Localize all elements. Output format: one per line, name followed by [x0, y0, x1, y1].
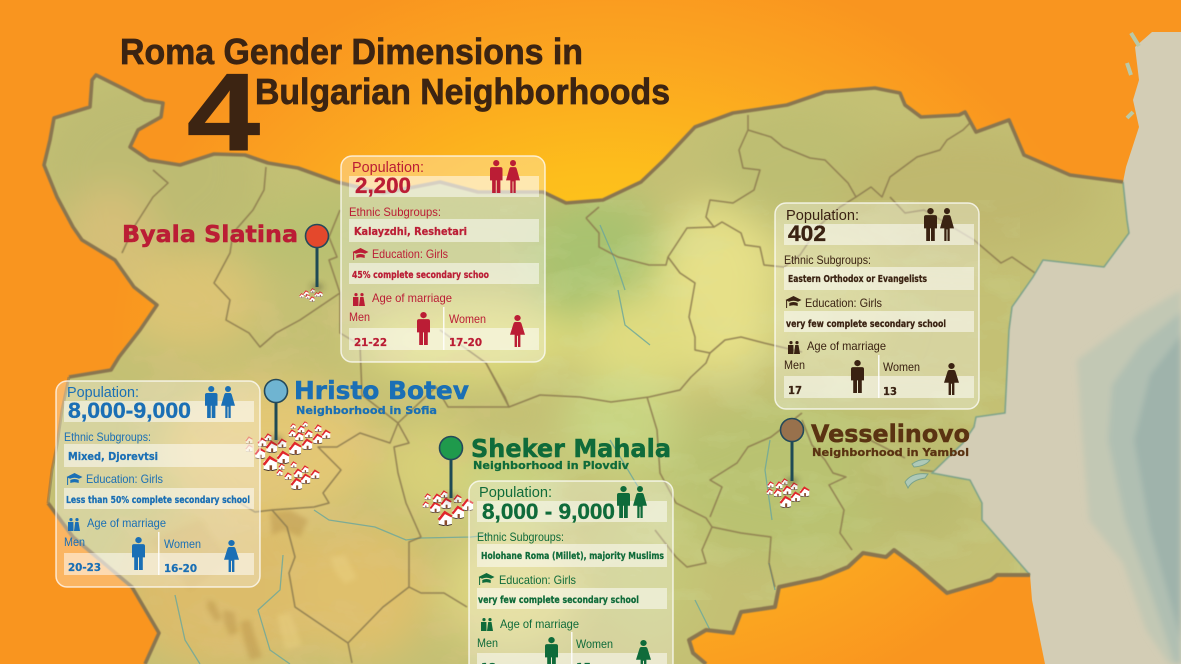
age of marriage — [349, 291, 525, 349]
age of marriage: 17 — [788, 384, 802, 397]
age of marriage: Age of marriage — [372, 291, 452, 305]
location: Hristo Botev — [245, 376, 469, 490]
population: Population: — [67, 384, 139, 401]
location: Byala Slatina — [122, 222, 328, 302]
ethnic subgroups: Holohane Roma (Millet), majority Muslims — [481, 551, 664, 562]
title: Bulgarian Neighborhoods — [255, 71, 670, 112]
name: Byala Slatina — [122, 222, 298, 248]
age of marriage: Age of marriage — [500, 617, 579, 631]
education — [352, 247, 489, 281]
pin — [780, 418, 804, 484]
pin — [264, 380, 288, 443]
population: 2,200 — [355, 173, 411, 198]
education: Education: Girls — [86, 472, 163, 486]
Black Sea coast — [932, 182, 1129, 575]
houses — [299, 288, 323, 302]
age of marriage: 16-20 — [164, 562, 197, 575]
education — [66, 472, 250, 506]
education: very few complete secondary school — [478, 595, 639, 606]
houses — [766, 478, 810, 508]
title: Roma Gender Dimensions in — [120, 31, 583, 72]
age of marriage: 13 — [883, 385, 897, 398]
ethnic subgroups: Ethnic Subgroups: — [349, 205, 441, 219]
pin — [306, 224, 328, 290]
subtitle: Neighborhood in Sofia — [296, 404, 437, 417]
age of marriage: 17-20 — [449, 336, 482, 349]
age of marriage: 20-23 — [68, 561, 101, 574]
houses — [422, 490, 474, 526]
ethnic subgroups — [349, 205, 467, 238]
sea and neighbouring area — [900, 32, 1181, 664]
age of marriage: 21-22 — [354, 336, 387, 349]
age of marriage — [784, 339, 959, 398]
population: 402 — [788, 221, 826, 246]
age of marriage: Men — [349, 310, 370, 324]
age of marriage — [64, 516, 239, 575]
population: 8,000 - 9,000 — [482, 499, 615, 524]
subtitle: Neighborhood in Plovdiv — [473, 459, 630, 472]
education: very few complete secondary school — [786, 319, 946, 330]
education: Education: Girls — [372, 247, 448, 261]
population — [67, 384, 235, 423]
age of marriage: Women — [164, 537, 201, 551]
education — [478, 573, 639, 606]
education: Less than 50% complete secondary school — [66, 495, 250, 506]
ethnic subgroups — [784, 253, 927, 285]
education: 45% complete secondary schoo — [352, 270, 489, 281]
panel: Byala Slatina — [341, 156, 545, 362]
age of marriage: Age of marriage — [87, 516, 166, 530]
ethnic subgroups: Ethnic Subgroups: — [64, 430, 151, 444]
age of marriage: Women — [449, 312, 486, 326]
ethnic subgroups: Ethnic Subgroups: — [477, 530, 564, 544]
name: Vesselinovo — [811, 420, 970, 448]
age of marriage: Men — [477, 636, 498, 650]
age of marriage: Women — [883, 360, 920, 374]
education: Education: Girls — [499, 573, 576, 587]
location: Vesselinovo — [766, 418, 970, 508]
numeral 4: 4 — [187, 51, 260, 174]
education: Education: Girls — [805, 296, 882, 310]
population: 8,000-9,000 — [68, 398, 191, 423]
age of marriage: Women — [576, 637, 613, 651]
ethnic subgroups: Eastern Orthodox or Evangelists — [788, 274, 927, 285]
population: Population: — [479, 484, 552, 501]
rivers — [175, 225, 775, 664]
age of marriage — [477, 617, 651, 664]
lakes — [905, 460, 930, 488]
ethnic subgroups: Mixed, Djorevtsi — [68, 450, 158, 463]
age of marriage: Men — [784, 358, 805, 372]
population — [786, 207, 954, 246]
ridges — [207, 510, 308, 660]
ethnic subgroups: Kalayzdhi, Reshetari — [354, 225, 467, 238]
name: Sheker Mahala — [471, 434, 671, 463]
location: Sheker Mahala — [422, 434, 671, 526]
panel: Hristo Botev — [56, 381, 260, 587]
population — [479, 484, 647, 524]
name: Hristo Botev — [294, 376, 469, 405]
education — [786, 296, 946, 330]
age of marriage: Age of marriage — [807, 339, 886, 353]
population — [352, 159, 520, 198]
houses — [245, 421, 331, 490]
population: Population: — [352, 159, 424, 176]
ethnic subgroups — [477, 530, 664, 562]
panel: Sheker Mahala — [469, 481, 673, 664]
regional borders — [122, 115, 1035, 663]
terrain colours — [73, 192, 892, 664]
ethnic subgroups: Ethnic Subgroups: — [784, 253, 871, 267]
population: Population: — [786, 207, 859, 224]
title — [120, 31, 670, 174]
pin — [440, 436, 462, 501]
subtitle: Neighborhood in Yambol — [812, 446, 969, 459]
panel: Vesselinovo — [775, 203, 979, 409]
ethnic subgroups — [64, 430, 158, 463]
age of marriage: Men — [64, 535, 85, 549]
